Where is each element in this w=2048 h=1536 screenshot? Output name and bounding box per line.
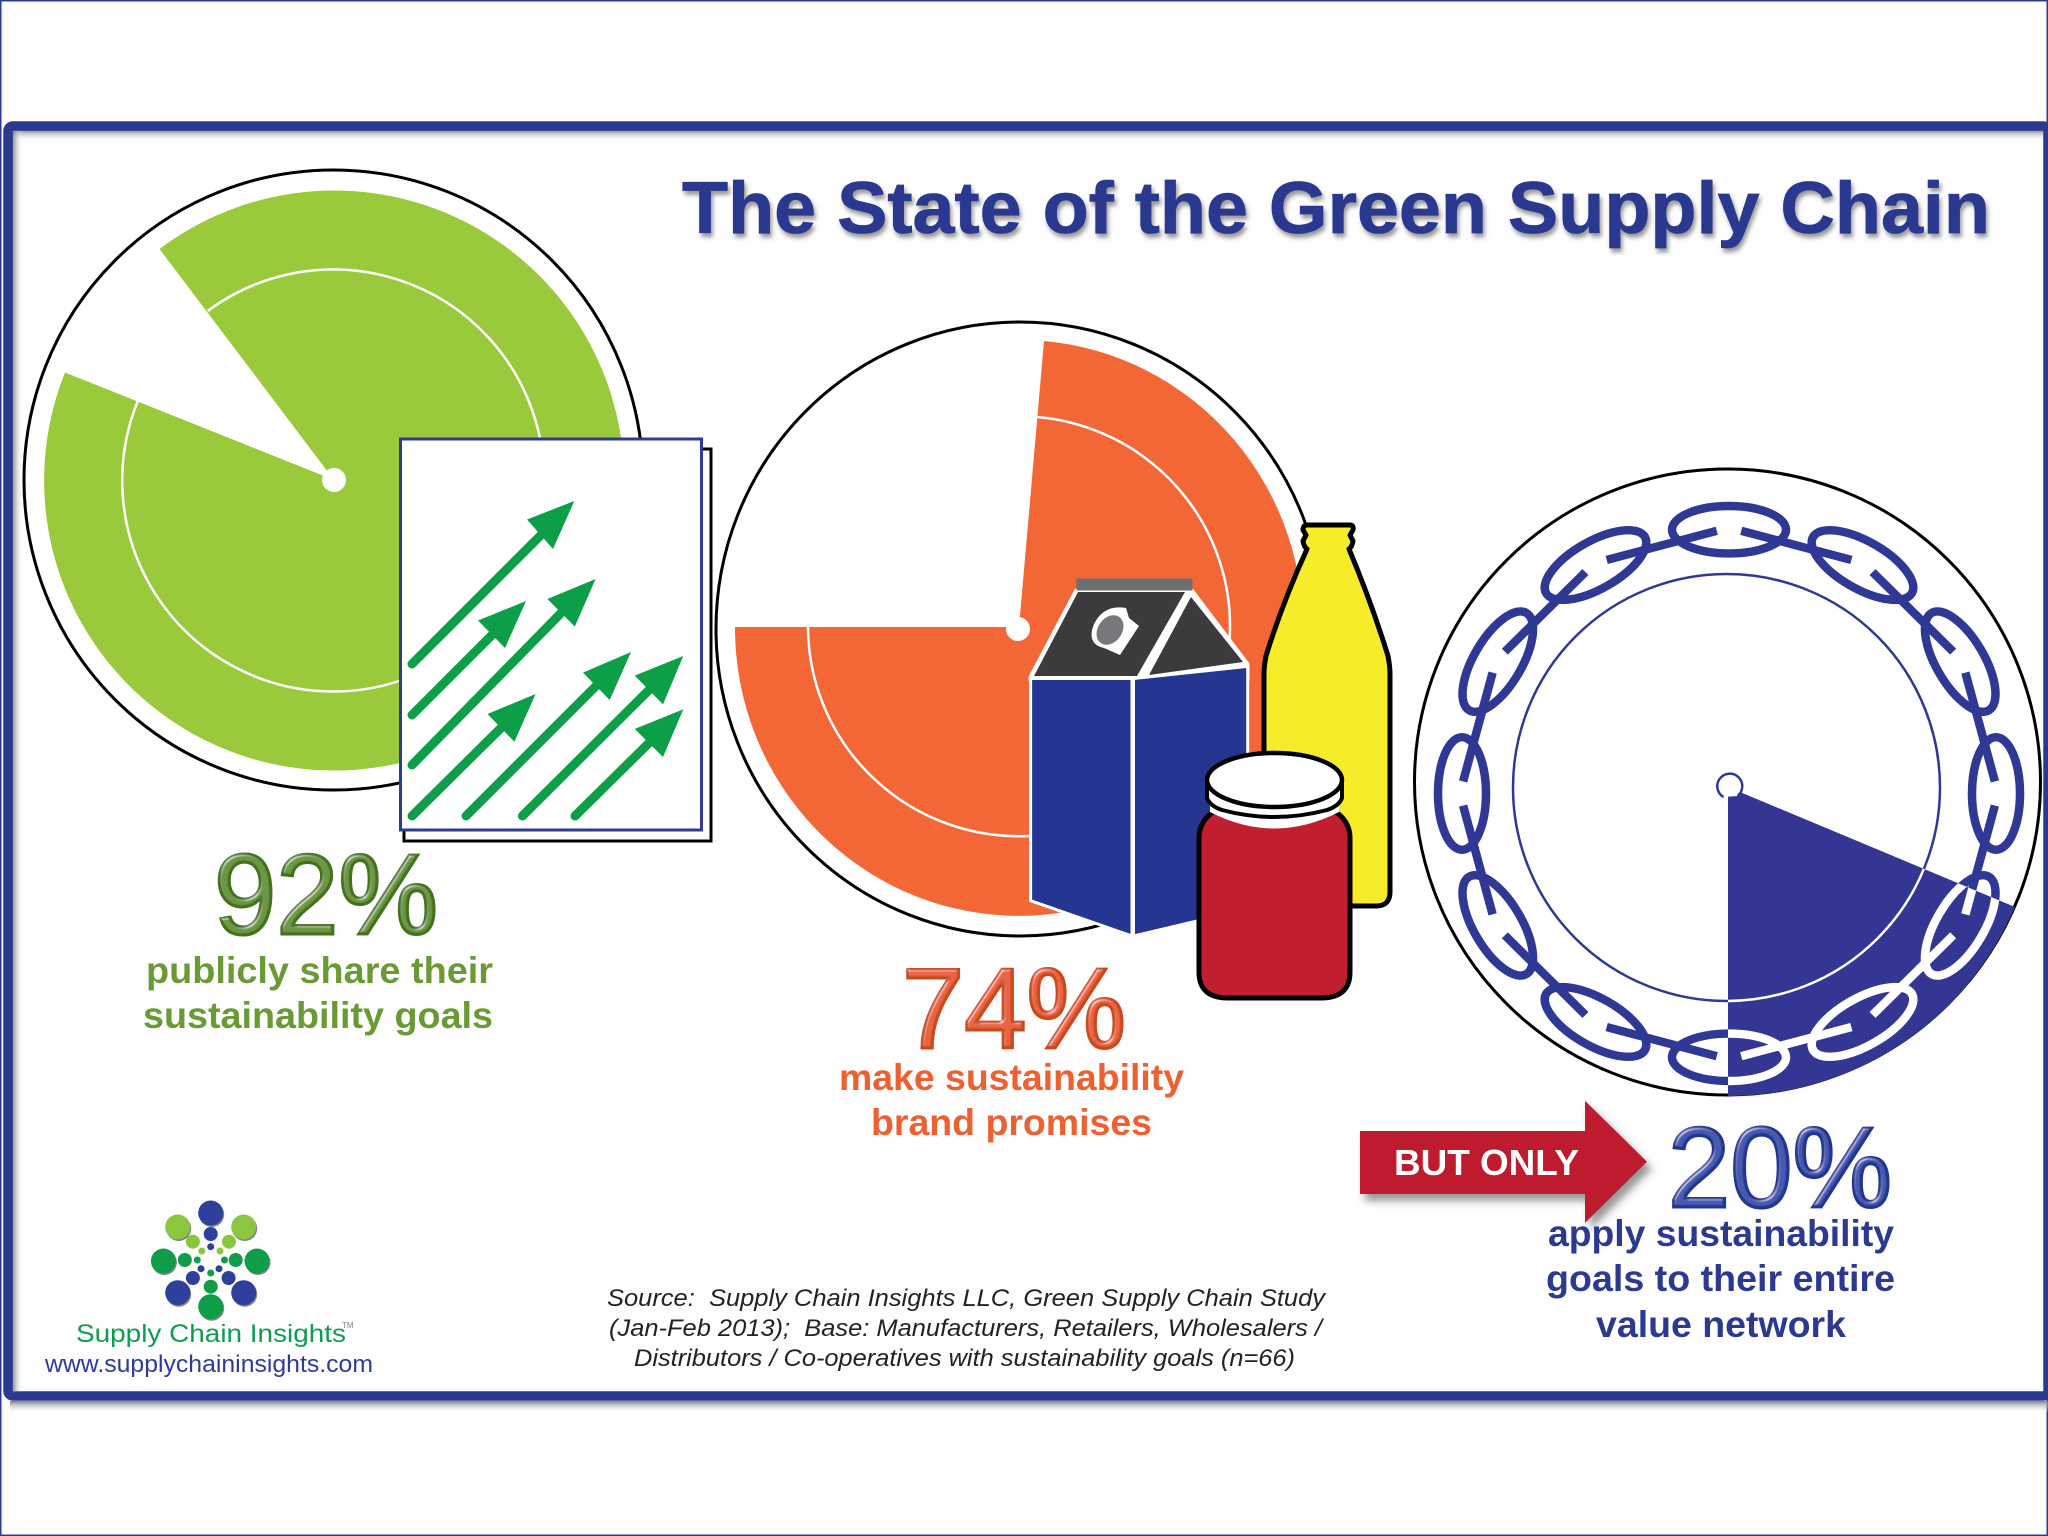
jar body [1199,812,1350,998]
label: apply sustainability goals to their entire value network: goals to their entire [1546,1258,1895,1299]
logo: Supply Chain Insights [44,1200,373,1378]
title: The State of the Green Supply Chain [682,168,1990,249]
label: publicly share their sustainability goals: publicly share their [146,950,493,991]
carton gable right [1149,597,1243,675]
carton left face [1031,678,1132,936]
source note: Distributors / Co-operatives with sustainability goals (n=66) [634,1345,1295,1372]
arrow 2 [412,601,526,715]
trademark: TM [342,1321,354,1330]
inner ring [122,270,544,692]
source note [607,1285,1327,1372]
carton gable left [1034,592,1185,676]
pie outline [716,322,1324,936]
arrow 3 [412,579,596,765]
panel: 92% pie chart [24,170,643,790]
carton right face [1134,666,1248,936]
navy pie sector [1728,792,2015,1096]
arrow 6 [522,656,683,816]
callout arrow: BUT ONLY: BUT ONLY [1394,1142,1579,1183]
chain ring [1438,506,2020,1081]
jar lid top [1207,753,1342,807]
stat: 92%: 92% [214,832,438,959]
label: apply sustainability goals to their entire value network: value network [1596,1304,1846,1345]
logo url: www.supplychaininsights.com [44,1351,373,1378]
jar neck [1210,800,1339,828]
label: make sustainability brand promises [839,1057,1184,1143]
carton spout [1091,607,1139,655]
arrow 5 [466,652,631,816]
icon: document with rising arrows [400,439,711,841]
green pie sector [44,191,624,771]
arrow 4 [412,694,536,816]
arrow 1 [412,501,574,664]
inner ring [1513,574,1940,1001]
inner ring [808,417,1230,836]
pie outline [24,170,643,790]
pie outline [1414,469,2040,1095]
logo name: Supply Chain Insights [76,1320,346,1348]
carton white backing [1030,590,1248,680]
panel: 20% pie chart with chain [1413,468,2042,1096]
jar lid rim [1207,782,1342,817]
source note: Source: Supply Chain Insights LLC, Green Supply Chain Study [607,1285,1327,1312]
label: make sustainability brand promises: make sustainability [839,1057,1184,1098]
label: apply sustainability goals to their entire value network: apply sustainability [1548,1213,1894,1254]
stat: 20%: 20% [1668,1105,1892,1232]
icon: milk carton [1030,578,1248,936]
arrow 7 [575,709,683,816]
pie hub [322,468,346,492]
stat: 74%: 74% [902,946,1126,1073]
callout arrow: BUT ONLY [1360,1101,1647,1223]
panel: 74% pie chart [716,322,1324,936]
label: publicly share their sustainability goals: sustainability goals [143,995,493,1036]
orange pie sector [735,341,1303,916]
icon: red jar [1199,753,1350,998]
pie hub [1717,774,1742,797]
logo mark [151,1200,270,1321]
pie hub [1006,617,1030,641]
label: apply sustainability goals to their entire value network [1546,1213,1895,1345]
icon: yellow bottle [1264,525,1390,906]
label: make sustainability brand promises: brand promises [871,1102,1152,1143]
source note: (Jan-Feb 2013); Base: Manufacturers, Retailers, Wholesalers / [609,1315,1324,1342]
label: publicly share their sustainability goals [143,950,493,1036]
carton top strip [1076,578,1192,590]
